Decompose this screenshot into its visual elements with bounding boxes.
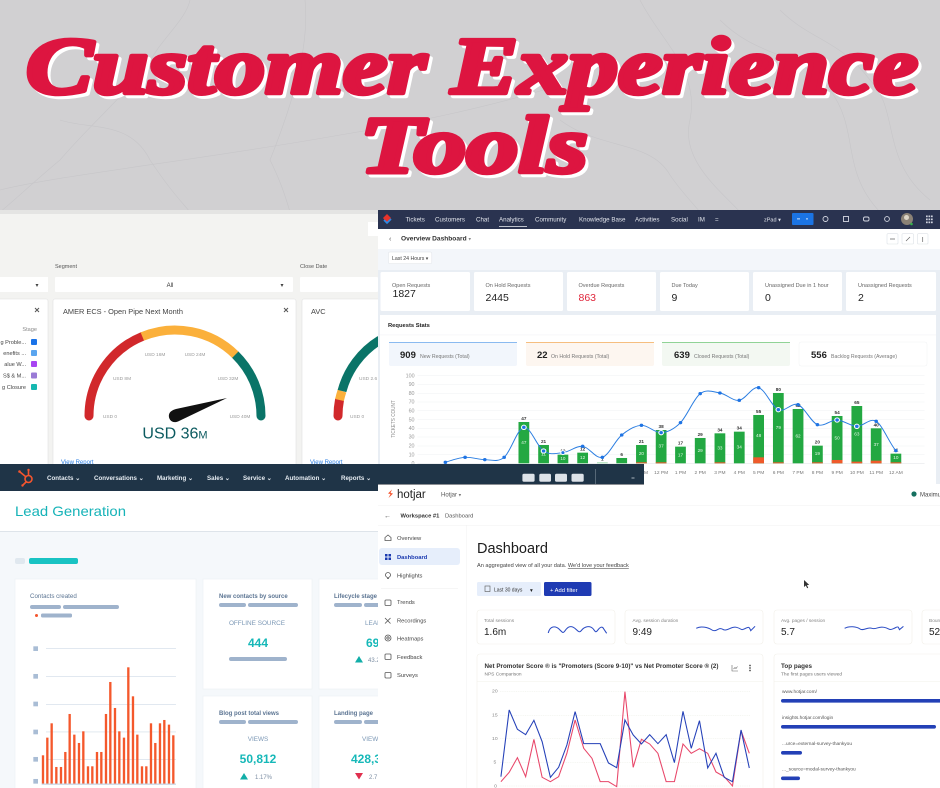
top navigation bar: Social [671, 216, 688, 224]
top bar: hotjar [397, 489, 426, 501]
title: Customer Experience [26, 23, 918, 111]
gauge tick labels: USD 16M [145, 352, 165, 358]
title: Tools [360, 102, 588, 190]
bar and line chart: tickets count: 10 [409, 452, 415, 458]
card: AVC gauge: USD 0 [350, 414, 364, 420]
stat: backlog requests [799, 342, 927, 366]
trend line [445, 388, 896, 462]
panel: requests stats [380, 315, 936, 485]
bar totals: 80 [776, 387, 781, 392]
stat: on hold requests [526, 342, 654, 366]
bar inner values: 50 [835, 435, 840, 440]
card: landing page: 428,3 [351, 752, 381, 766]
top navigation bar: Tickets [406, 216, 425, 224]
panel: hotjar dashboard [378, 484, 940, 788]
stat: backlog requests: Backlog Requests (Average) [831, 354, 897, 360]
bar inner values: 37 [874, 442, 879, 447]
card: top pages: ...urce=external-survey-thankyou [782, 741, 852, 747]
bar inner values: 34 [737, 445, 742, 450]
bar totals: 40 [874, 422, 879, 427]
KPI: on hold requests [474, 272, 563, 311]
bar totals: 6 [620, 452, 624, 457]
page header [0, 491, 378, 532]
KPI: average session duration: Avg. session duration [632, 618, 679, 624]
KPI: on hold requests: On Hold Requests [486, 283, 531, 289]
sub header [378, 229, 940, 249]
card: AVC gauge [302, 298, 378, 464]
top navigation bar: IM [698, 216, 705, 224]
date filter row: Last 24 Hours ▾ [392, 256, 429, 262]
navigation bar: Sales ⌄ [207, 475, 230, 482]
bar totals: 38 [659, 424, 664, 429]
bar totals: 47 [521, 416, 527, 421]
card: stage legend: enefits ... [3, 351, 26, 357]
bar totals: 55 [756, 409, 762, 414]
bar totals: 21 [541, 439, 547, 444]
bar inner values: 29 [698, 448, 703, 453]
card: top pages: Top pages [781, 663, 813, 670]
card: lifecycle stage [320, 580, 378, 688]
filter buttons [477, 582, 592, 596]
KPI: unassigned requests [846, 272, 936, 311]
navigation bar: Marketing ⌄ [157, 475, 193, 482]
breadcrumb: Dashboard [445, 514, 473, 520]
navigation bar [0, 464, 644, 491]
top navigation bar: = [715, 216, 719, 224]
filter: segment select: All [167, 283, 173, 289]
panel: requests stats: Requests Stats [388, 323, 430, 329]
card: top pages: www.hotjar.com/ [782, 689, 818, 695]
card: landing page: Landing page [334, 711, 374, 717]
bar inner values: 12 [580, 455, 586, 460]
sidebar navigation: Heatmaps [397, 636, 424, 642]
gauge tick labels [103, 352, 250, 420]
filter buttons: ▾ [530, 588, 533, 594]
card: top pages: insights.hotjar.com/login [782, 715, 834, 721]
top navigation bar: zPad ▾ [764, 218, 781, 224]
KPI: bounce rate: 52 [929, 627, 940, 638]
card: blog post total views: 50,812 [240, 752, 277, 766]
trend markers [444, 386, 898, 464]
x axis labels: 4 PM [734, 470, 745, 475]
filter buttons: Last 30 days [494, 588, 523, 594]
card: stage legend: alue W... [4, 362, 26, 368]
bar and line chart: tickets count: 50 [409, 417, 415, 423]
x axis labels: 1 PM [675, 470, 686, 475]
stat: new requests [389, 342, 517, 366]
bar and line chart: tickets count: 70 [409, 400, 415, 406]
sidebar navigation: Feedback [397, 655, 423, 661]
top bar [378, 489, 940, 506]
card: AMER ECS open pipe gauge [53, 299, 296, 469]
panel: lead generation dashboard [0, 464, 644, 788]
card: AVC gauge: USD 2.6 [359, 376, 377, 382]
bar chart: contacts [33, 646, 176, 785]
bar and line chart: tickets count: 20 [409, 444, 415, 450]
card: new contacts by source [203, 579, 312, 689]
card: landing page [320, 696, 378, 788]
x axis labels: 10 PM [850, 470, 864, 475]
KPI: due today [660, 272, 749, 311]
bar inner values: 19 [815, 451, 820, 456]
bar inner values: 33 [717, 445, 723, 450]
KPI: unassigned due in 1 hour: 0 [765, 292, 771, 304]
gauge value: USD 36M [142, 426, 208, 442]
gauge arc [89, 330, 261, 416]
x axis labels: 8 PM [812, 470, 823, 475]
KPI: unassigned due in 1 hour: Unassigned Due in 1 hour [765, 283, 829, 289]
line chart: nps comparison: 15 [492, 712, 498, 718]
filter buttons: + Add filter [550, 588, 578, 594]
KPI: open requests: Open Requests [392, 283, 430, 289]
bar totals: 20 [815, 440, 820, 445]
card: AMER ECS open pipe gauge: View Report [61, 460, 94, 466]
KPI: total sessions [477, 610, 615, 644]
KPI: unassigned requests: 2 [858, 292, 864, 304]
top navigation bar: Activities [635, 216, 659, 224]
card: stage legend: S$ & M... [3, 374, 26, 380]
bar inner values: 11 [541, 452, 547, 457]
navigation bar: Conversations ⌄ [94, 475, 144, 482]
bar totals: 65 [854, 400, 860, 405]
bar inner values: 20 [639, 451, 645, 456]
page header: Lead Generation [15, 503, 126, 519]
stat: on hold requests: On Hold Requests (Total) [551, 354, 610, 360]
card: lifecycle stage: Lifecycle stage [334, 594, 378, 600]
card: stage legend: Stage [22, 327, 37, 333]
card: AVC gauge: View Report [310, 460, 343, 466]
line chart: nps comparison: 20 [492, 689, 498, 695]
card: stage legend [0, 299, 48, 469]
KPI: unassigned requests: Unassigned Requests [858, 283, 912, 289]
title [26, 23, 918, 190]
card: AMER ECS open pipe gauge: AMER ECS - Open Pipe Next Month [63, 307, 183, 316]
bar and line chart: tickets count: 90 [409, 382, 415, 388]
card: new contacts by source: New contacts by source [219, 594, 288, 600]
card: net promoter score line chart: NPS Comparison [484, 672, 522, 678]
stat: backlog requests: 556 [811, 350, 827, 361]
bar and line chart: tickets count: TICKETS COUNT [391, 400, 397, 438]
breadcrumb: ← [384, 513, 391, 520]
card: blog post total views [203, 696, 312, 788]
x axis labels: 12 PM [654, 470, 668, 475]
filter: segment select: ▾ [280, 283, 284, 289]
gauge tick labels: USD 40M [230, 414, 250, 420]
cursor [804, 580, 809, 588]
card: net promoter score line chart: Net Promoter Score ® is "Promoters (Score 9-10)" vs Net Promoter Score ® (2) [484, 662, 718, 670]
bar totals: 11 [893, 448, 899, 453]
bar and line chart: tickets count: 80 [409, 391, 415, 397]
card: new contacts by source: OFFLINE SOURCE [229, 620, 285, 627]
bar totals: 29 [698, 432, 703, 437]
gauge tick labels: USD 0 [103, 414, 117, 420]
bar inner values: 48 [756, 433, 762, 438]
bar totals: 21 [639, 439, 645, 444]
stat: on hold requests: 22 [537, 350, 548, 361]
navigation bar: Contacts ⌄ [47, 475, 80, 482]
x axis labels: 7 PM [792, 470, 804, 475]
orange overdue segments [636, 457, 901, 463]
top navigation bar: Chat [476, 216, 489, 224]
bar totals: 10 [560, 449, 566, 454]
KPI: average pages per session: Avg. pages / session [781, 618, 826, 624]
filter: close date select: Close Date [300, 264, 327, 270]
card: new contacts by source: 444 [248, 636, 268, 650]
navigation bar: Automation ⌄ [285, 475, 326, 482]
bar totals: 54 [835, 410, 840, 415]
background: grey topographic map [0, 0, 940, 212]
x axis labels: 9 PM [831, 470, 843, 475]
bar and line chart: tickets count: 30 [409, 435, 415, 441]
bar and line chart: tickets count: 40 [409, 426, 415, 432]
card: stage legend: g Proble... [0, 340, 26, 346]
bar inner values: 47 [521, 440, 527, 445]
filter: close date select [300, 264, 378, 292]
filter pills [15, 558, 78, 564]
card: stage legend: g Closure [2, 385, 26, 391]
KPI: unassigned due in 1 hour [753, 272, 842, 311]
gauge tick labels: USD 24M [185, 352, 205, 358]
x axis labels: 5 PM [753, 470, 764, 475]
heading: Dashboard [477, 541, 548, 557]
gauge needle [169, 398, 227, 422]
filter: segment select: ▾ [35, 283, 39, 289]
top navigation bar: Analytics [499, 216, 524, 224]
KPI: total sessions: 1.6m [484, 627, 506, 638]
KPI: overdue requests [567, 272, 656, 311]
bar and line chart: tickets count [391, 373, 925, 475]
KPI: overdue requests: 863 [578, 292, 596, 304]
card: net promoter score line chart [477, 654, 763, 788]
card: landing page: 2.7 [369, 775, 378, 781]
x axis labels: 3 PM [714, 470, 726, 475]
card: blog post total views: Blog post total views [219, 711, 280, 717]
bar inner values: 10 [560, 456, 566, 461]
bar totals: 1 [601, 456, 604, 461]
stat: closed requests: Closed Requests (Total) [694, 354, 750, 360]
KPI: open requests [380, 272, 470, 311]
KPI: bounce rate [922, 610, 940, 644]
sidebar navigation: Recordings [397, 618, 426, 624]
bar inner values: 37 [659, 443, 664, 448]
card: AVC gauge: AVC [311, 307, 326, 316]
bar totals: 34 [737, 426, 742, 431]
sidebar icons [385, 535, 391, 678]
filter: segment select: Segment [55, 264, 77, 270]
bar inner values: 63 [854, 431, 860, 436]
navigation bar: Reports ⌄ [341, 475, 371, 482]
stat: new requests: 909 [400, 350, 416, 361]
gauge tick labels: USD 32M [218, 376, 238, 382]
bar totals: 62 [795, 403, 801, 408]
KPI: average session duration [625, 610, 763, 644]
date filter row [378, 249, 940, 270]
bar and line chart: tickets count: 0 [412, 461, 415, 467]
x axis labels: 6 PM [773, 470, 784, 475]
KPI: average pages per session [774, 610, 912, 644]
bar inner values: 10 [893, 455, 899, 460]
sidebar navigation [379, 525, 466, 788]
line chart: nps comparison [492, 689, 750, 788]
stat: closed requests [662, 342, 790, 366]
KPI: due today: 9 [672, 292, 678, 304]
x axis labels: 12 AM [889, 470, 903, 475]
bar inner values: 62 [795, 433, 801, 438]
KPI: on hold requests: 2445 [486, 292, 509, 304]
green bars [518, 393, 901, 463]
sidebar navigation: Highlights [397, 574, 423, 580]
breadcrumb [378, 513, 940, 526]
KPI: total sessions: Total sessions [484, 618, 515, 624]
card: lifecycle stage: LEADS [365, 620, 386, 627]
gauge tick labels: USD 8M [113, 376, 131, 382]
bar inner values [521, 425, 899, 461]
sub header: ‹ [389, 236, 392, 243]
bar and line chart: tickets count: 60 [409, 408, 415, 414]
stat: closed requests: 639 [674, 350, 690, 361]
card: contacts created: Contacts created [30, 593, 77, 600]
navigation bar: Service ⌄ [243, 475, 272, 482]
sidebar navigation: Dashboard [397, 555, 428, 561]
sidebar navigation: Overview [397, 536, 422, 542]
sub header: Overview Dashboard ▾ [401, 236, 471, 242]
bar totals: 12 [580, 447, 586, 452]
KPI: average pages per session: 5.7 [781, 627, 795, 638]
bar inner values: 17 [678, 452, 684, 457]
line chart: nps comparison: 10 [492, 736, 498, 742]
bar totals: 34 [717, 427, 723, 432]
KPI: due today: Due Today [672, 283, 698, 289]
top navigation bar: Knowledge Base [579, 216, 626, 224]
subtitle: An aggregated view of all your data. We'd love your feedback [477, 563, 629, 569]
bar inner values: 79 [776, 425, 781, 430]
card: top pages: ..._source=modal-survey-thankyou [782, 766, 856, 772]
card: lifecycle stage: 69 [366, 636, 380, 650]
top bar: Hotjar ▾ [441, 492, 462, 498]
top navigation bar: Customers [435, 216, 465, 224]
card: blog post total views: VIEWS [248, 736, 268, 743]
bar totals: 17 [678, 441, 684, 446]
sidebar navigation: Trends [397, 600, 415, 606]
panel: sales pipeline gauge dashboard [0, 210, 392, 469]
x axis labels: 2 PM [695, 470, 706, 475]
breadcrumb: Workspace #1 [400, 514, 440, 520]
bar totals [521, 387, 899, 461]
filter: segment select [0, 264, 293, 292]
line chart: nps comparison: 5 [493, 760, 497, 766]
KPI: overdue requests: Overdue Requests [578, 283, 625, 289]
x axis labels [635, 470, 903, 475]
top navigation bar [378, 210, 940, 229]
card: blog post total views: 1.17% [255, 775, 273, 781]
x axis labels: 11 PM [869, 470, 883, 475]
sidebar navigation: Surveys [397, 673, 418, 679]
stat: new requests: New Requests (Total) [420, 354, 470, 360]
card: top pages [774, 654, 940, 788]
card: lifecycle stage: 43.2 [368, 658, 380, 664]
panel: overview dashboard requests [378, 210, 940, 485]
card: landing page: VIEWS [362, 736, 383, 743]
KPI: open requests: 1827 [392, 288, 416, 300]
card: top pages: The first pages users viewed [781, 672, 842, 678]
top navigation bar: Community [535, 216, 567, 224]
card: contacts created [15, 579, 196, 788]
bar and line chart: tickets count: 100 [406, 373, 415, 379]
x axis labels: 11 AM [635, 470, 648, 475]
KPI: average session duration: 9:49 [632, 627, 652, 638]
